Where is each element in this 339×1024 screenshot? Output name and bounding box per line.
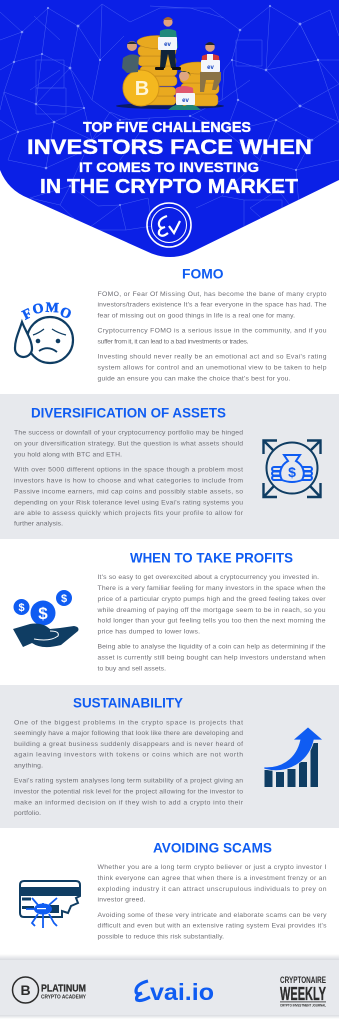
icon: worried face with FOMO lettering: M bbox=[45, 301, 59, 316]
text block: sustainability: One of the biggest problems in the crypto space is projects that bbox=[14, 719, 243, 726]
illustration: investors on bitcoin coins: ev bbox=[164, 42, 171, 48]
icon: hand with coins bbox=[13, 590, 78, 647]
panel: FOMO bbox=[0, 261, 339, 393]
text block: FOMO: system allows for control and an unemotional view to be taken to help bbox=[98, 365, 327, 372]
header logo badge bbox=[147, 203, 191, 247]
panel: avoiding scams bbox=[0, 830, 339, 958]
text block: diversification: on your diversification strategy. But the question is what assets should bbox=[14, 441, 243, 448]
text block: diversification: investors have is how to choose and what categories to include from bbox=[14, 477, 243, 484]
text block: FOMO: guide an ensure you can make the choice that's best for you. bbox=[98, 375, 291, 382]
text block: sustainability: portfolio. bbox=[14, 810, 41, 817]
heading: diversification: DIVERSIFICATION OF ASSETS bbox=[31, 405, 226, 421]
investor left bbox=[127, 41, 137, 51]
text block: profits: while dreaming of paying off the mortgage seem to be in reach, so you bbox=[96, 607, 326, 614]
text block: diversification: The success or downfall of your cryptocurrency portfolio may be hinged bbox=[14, 430, 243, 437]
icon: worried face with FOMO lettering: F bbox=[20, 306, 35, 323]
logo: Evai.io: vai.io bbox=[150, 979, 214, 1005]
investor seated bbox=[179, 71, 189, 81]
text block: scams: Whether you are a long term crypto believer or just a crypto investor I bbox=[98, 864, 327, 871]
text block: diversification: With over 5000 different options in the space though a problem most bbox=[14, 467, 243, 474]
text block: profits: to buy and sell assets. bbox=[98, 665, 166, 672]
text block: diversification: are able to assess quickly which projects fits your profile to allow for bbox=[14, 510, 244, 517]
text block: profits: Being able to analyse the liquidity of a coin can help as determining if the bbox=[98, 644, 326, 651]
text block: scams: possible to reduce this risk substantially. bbox=[98, 934, 224, 941]
icon: rising bar chart with arrow bbox=[264, 727, 323, 787]
footer band bbox=[0, 954, 339, 1019]
text block: FOMO: Investing should never really be an emotional act and so Evai's rating bbox=[98, 354, 327, 361]
text block: scams: Avoiding some of these very intricate and elaborate scams can be very bbox=[98, 912, 327, 919]
text block: profits: price of a particular crypto pumps high and the greed feeling takes over bbox=[98, 596, 326, 603]
title: INVESTORS FACE WHEN bbox=[27, 135, 312, 159]
icon: credit card with spider bbox=[20, 881, 80, 928]
text block: FOMO: suffer from it, it can lead to a bad investments or trades. bbox=[98, 338, 249, 345]
text block: FOMO: investors/traders existence It's a fear everyone in the space has had. The bbox=[98, 302, 327, 309]
logo: Cryptonaire Weekly bbox=[280, 975, 327, 1008]
text block: sustainability: Evai's rating system analyses long term suitability of a project giving an bbox=[14, 778, 243, 785]
title: IT COMES TO INVESTING bbox=[79, 159, 259, 175]
text block: diversification: depending on your Risk tolerance level using Evai's rating systems you bbox=[14, 499, 243, 506]
text block: scams: investor greed. bbox=[98, 897, 146, 904]
header banner bbox=[0, 0, 339, 257]
text block: profits bbox=[96, 574, 326, 672]
investor standing bbox=[163, 17, 173, 27]
text block: FOMO: FOMO, or Fear Of Missing Out, has become the bane of many crypto bbox=[98, 291, 327, 298]
coin stacks bbox=[137, 36, 219, 106]
logo: Platinum Crypto Academy bbox=[12, 977, 87, 1003]
text block: profits: hold longer than your gut feeling tells you too then the next morning the bbox=[98, 618, 326, 625]
text block: profits: There is a very familiar feeling for many investors in the space when the bbox=[98, 585, 326, 592]
illustration: investors on bitcoin coins: ev bbox=[207, 65, 214, 71]
logo: Platinum Crypto Academy: CRYPTO ACADEMY bbox=[41, 994, 87, 1000]
text block: FOMO: fear of missing out on good things in life is a real one for many. bbox=[98, 313, 295, 320]
title bbox=[27, 120, 312, 198]
icon: money bag with arrows bbox=[264, 440, 320, 497]
logo: Cryptonaire Weekly: CRYPTO INVESTMENT JOURNAL bbox=[280, 1004, 327, 1008]
icon: worried face with FOMO lettering bbox=[15, 301, 73, 363]
heading: sustainability: SUSTAINABILITY bbox=[73, 695, 184, 711]
text block: sustainability bbox=[14, 719, 244, 817]
big bitcoin bbox=[123, 70, 159, 106]
text block: scams: think everyone can agree that when there is a investment frenzy or an bbox=[98, 875, 327, 882]
text block: diversification: you hold along with BTC and ETH. bbox=[14, 452, 122, 459]
illustration: investors on bitcoin coins: B bbox=[135, 78, 149, 100]
text block: sustainability: anything. bbox=[14, 762, 43, 769]
icon: hand with coins: $ bbox=[38, 604, 48, 623]
text block: sustainability: seemingly have a major following that look like there are developing and bbox=[14, 730, 243, 737]
icon: hand with coins: $ bbox=[61, 593, 67, 605]
text block: FOMO bbox=[98, 291, 327, 382]
panel: sustainability bbox=[0, 685, 339, 828]
icon: money bag with arrows: $ bbox=[288, 464, 296, 480]
panel: diversification of assets bbox=[0, 394, 339, 539]
text block: sustainability: investor the potential risk level for the project allowing for the investor to bbox=[14, 788, 243, 795]
text block: sustainability: again leaving investors with tokens or coins which are not worth bbox=[14, 752, 243, 759]
text block: profits: price has dumped to lower lows. bbox=[98, 629, 200, 636]
text block: sustainability: make an informed decision on if they wish to add a crypto into their bbox=[14, 799, 244, 806]
heading: profits: WHEN TO TAKE PROFITS bbox=[130, 550, 293, 566]
text block: profits: It's so easy to get overexcited about a cryptocurrency you invested in. bbox=[98, 574, 319, 581]
text block: FOMO: Cryptocurrency FOMO is a serious issue in the community, and if you bbox=[98, 328, 327, 335]
title: IN THE CRYPTO MARKET bbox=[40, 176, 298, 198]
text block: scams bbox=[98, 864, 327, 941]
logo: Platinum Crypto Academy: B bbox=[20, 982, 31, 998]
ground shadow bbox=[116, 103, 224, 109]
illustration: investors on bitcoin coins: ev bbox=[182, 98, 189, 104]
text block: scams: exploding industry it can attract unscrupulous individuals to prey on bbox=[98, 886, 327, 893]
text block: diversification: Passive income earners, mid cap coins and possibly stable assets, so bbox=[14, 488, 243, 495]
text block: sustainability: building a great business suddenly disappears and is never heard of bbox=[14, 741, 243, 748]
heading: scams: AVOIDING SCAMS bbox=[153, 840, 272, 856]
panel: when to take profits bbox=[0, 540, 339, 684]
heading: FOMO: FOMO bbox=[182, 266, 224, 282]
investor right bbox=[205, 42, 215, 52]
icon: hand with coins: $ bbox=[18, 602, 25, 614]
logo: Platinum Crypto Academy: PLATINUM bbox=[41, 984, 86, 994]
hand bbox=[13, 624, 78, 647]
text block: diversification bbox=[14, 430, 244, 528]
icon: worried face with FOMO lettering: O bbox=[57, 305, 73, 323]
text block: profits: asset is currently still being bought can help investors understand when bbox=[98, 654, 326, 661]
illustration: investors on bitcoin coins bbox=[116, 17, 224, 110]
text block: scams: difficult and even but with an extensive rating system Evai provides it's bbox=[98, 923, 327, 930]
icon: worried face with FOMO lettering: O bbox=[31, 301, 45, 318]
text block: diversification: further analysis. bbox=[14, 521, 63, 528]
title: TOP FIVE CHALLENGES bbox=[83, 120, 251, 136]
